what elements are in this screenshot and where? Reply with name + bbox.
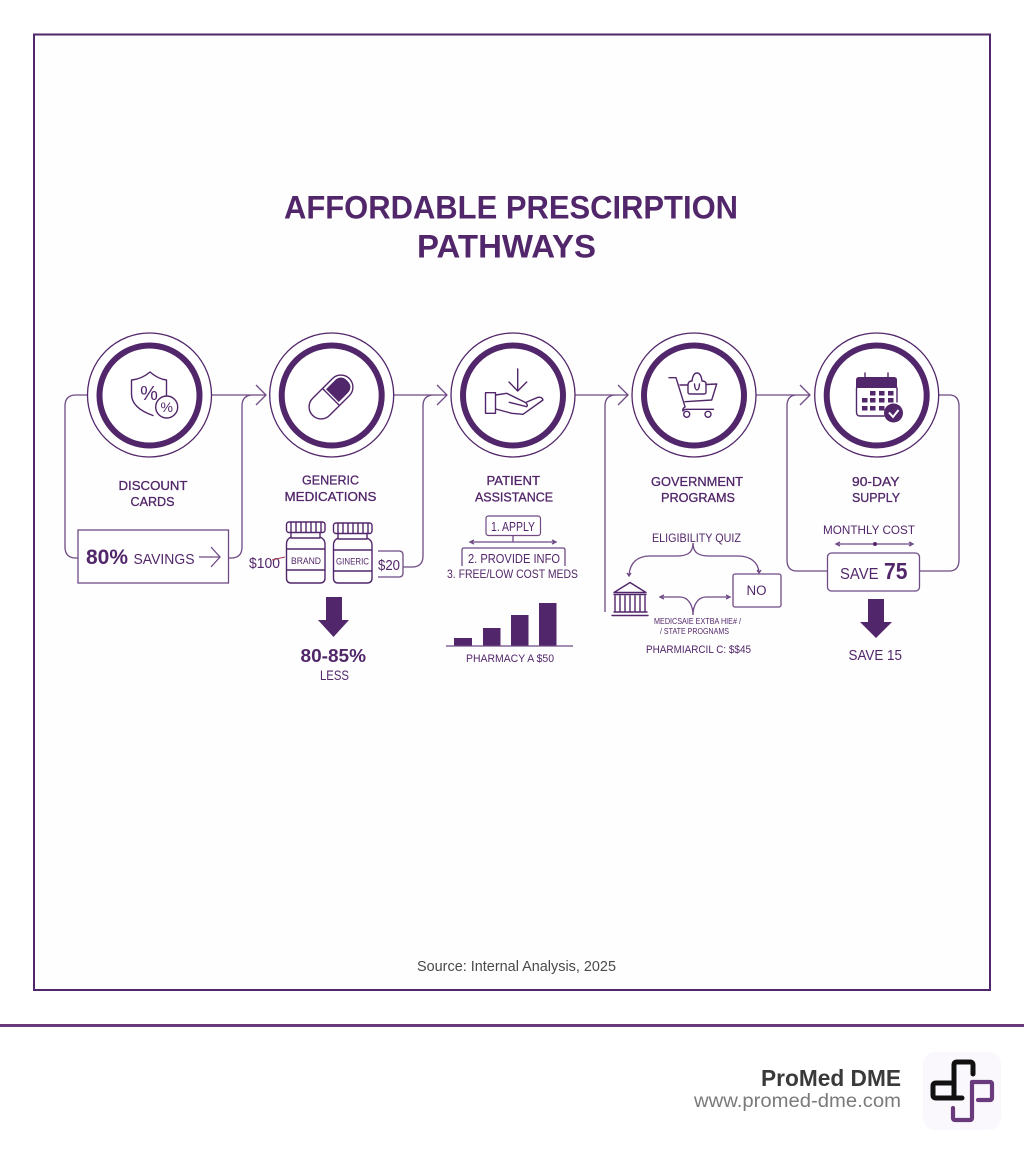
text: programs [654,616,742,636]
brand name: ProMed DME [761,1065,901,1091]
step 4: government programs [612,333,781,656]
connector lines [65,385,959,612]
price: $20 [378,551,403,577]
heading: government programs: PROGRAMS [661,490,735,505]
icon: generic bottle: GINERIC [336,556,369,566]
bar chart: pharmacy prices [446,603,573,665]
callout: save 75: 75 [884,558,908,584]
icon: capsule [270,333,394,457]
price: $100 struck through: $100 [249,556,280,572]
flow: application steps: 3. FREE/LOW COST MEDS [447,569,578,581]
icon: discount shield: % [160,399,173,415]
heading: patient assistance: ASSISTANCE [475,490,553,504]
icon: generic bottle [334,523,372,583]
text: pharmacy price: PHARMIARCIL C: $$45 [646,644,751,656]
heading: patient assistance: PATIENT [486,473,540,488]
callout: save 75: SAVE [840,566,878,583]
icon: calendar with check [815,333,939,457]
price: $20: $20 [378,558,400,574]
step 2: generic medications [249,333,403,683]
decision branches [627,543,761,615]
label: monthly cost [823,523,916,546]
arrow: down [860,599,892,638]
flow: application steps: 2. PROVIDE INFO [468,552,560,566]
footer rule [0,1024,1024,1027]
heading: generic medications: GENERIC [302,472,359,488]
callout: save 75 [828,553,920,591]
stat: save 15: SAVE 15 [848,648,902,664]
text: programs: / STATE PROGNAMS [660,626,729,636]
title: AFFORDABLE PRESCIRPTION [284,190,738,226]
label: monthly cost: MONTHLY COST [823,523,916,537]
flow: application steps: 1. APPLY [491,520,536,534]
step 3: patient assistance [446,333,578,665]
step 5: 90-day supply [815,333,939,664]
heading: 90-day supply: SUPPLY [852,490,900,505]
icon: discount shield [88,333,212,457]
stat: 80-85% less: LESS [320,668,349,683]
flow: application steps [447,516,578,581]
heading: generic medications: MEDICATIONS [284,489,377,504]
heading: 90-day supply: 90-DAY [852,474,900,489]
callout: 80% savings: SAVINGS [134,551,194,568]
callout: 80% savings [78,530,228,583]
outer frame [34,34,990,990]
stat: 80-85% less: 80-85% [300,645,366,666]
heading: discount cards [118,478,188,509]
icon: government building [612,582,648,616]
arrow: down [318,597,349,637]
icon: hand receiving [451,333,575,457]
box: no: NO [746,583,766,598]
heading: government programs [651,474,743,505]
bar chart: pharmacy prices: PHARMACY A $50 [466,653,554,665]
heading: government programs: GOVERNMENT [651,474,743,489]
callout: 80% savings: 80% [86,546,128,569]
heading: discount cards: CARDS [130,494,175,509]
icon: shopping cart [632,333,756,457]
brand url: www.promed-dme.com [693,1090,901,1112]
heading: patient assistance [475,473,553,504]
heading: discount cards: DISCOUNT [118,478,188,493]
stat: 80-85% less [300,645,366,683]
title [284,190,738,264]
heading: generic medications [284,472,377,504]
icon: discount shield: % [140,383,158,405]
title: PATHWAYS [417,228,596,264]
source note: Source: Internal Analysis, 2025 [417,959,616,975]
icon: brand bottle [286,522,325,583]
text: programs: MEDICSAIE EXTBA HIE# / [654,616,742,626]
box: no [733,574,781,607]
eligibility quiz label: ELIGIBILITY QUIZ [652,531,741,545]
step 1: discount cards [78,333,228,583]
logo [923,1052,1001,1130]
heading: 90-day supply [852,474,900,505]
icon: brand bottle: BRAND [291,556,321,566]
